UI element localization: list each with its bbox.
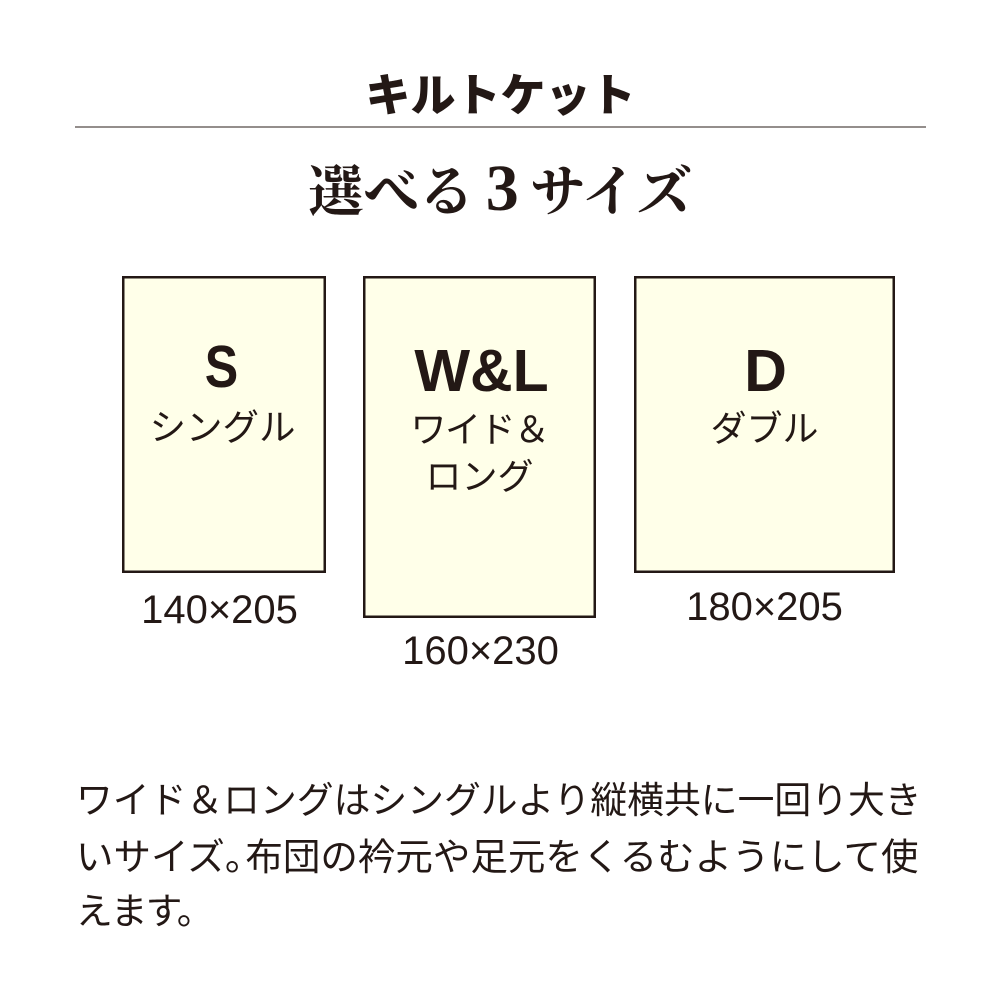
title: キルトケット — [365, 59, 636, 124]
subtitle: 選べる サイズ — [308, 147, 692, 227]
label: wide and long: ワイド＆ — [410, 401, 548, 453]
dimension W&L: 160×230 — [402, 629, 559, 673]
description text: いサイズ。布団の衿元や足元をくるむようにして使 — [76, 826, 918, 880]
label: wide and long — [410, 401, 548, 500]
size letter W&L: W&L — [414, 338, 549, 404]
description text — [76, 770, 922, 935]
description text: えます。 — [76, 881, 212, 935]
label: wide and long: ロング — [425, 448, 534, 500]
subtitle: 3 — [486, 152, 519, 225]
label: single: シングル — [150, 398, 296, 451]
dimension S: 140×205 — [141, 588, 298, 632]
panel: size W&L — [363, 276, 596, 618]
panel: size S — [122, 276, 326, 573]
size letter D: D — [744, 338, 787, 404]
label: double: ダブル — [710, 400, 818, 452]
dimension D: 180×205 — [686, 585, 843, 629]
size letter S: S — [205, 334, 238, 400]
panel: size D — [634, 276, 895, 573]
description text: ワイド＆ロングはシングルより縦横共に一回り大き — [76, 770, 922, 824]
